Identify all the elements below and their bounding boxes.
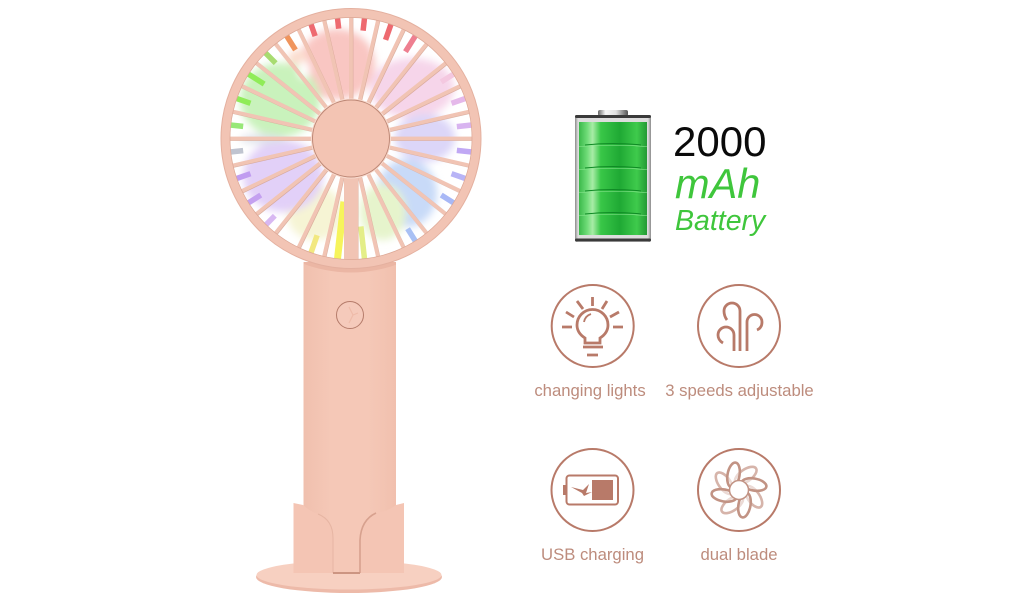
coloured light glow — [230, 18, 472, 259]
light strips — [230, 18, 472, 259]
battery capacity text: 2000 — [673, 118, 766, 165]
feature: 3 speeds adjustable — [665, 285, 814, 400]
battery charge cells — [579, 122, 647, 235]
fan head — [217, 4, 485, 272]
battery icon — [575, 110, 651, 242]
battery capacity text — [673, 118, 767, 237]
handle — [304, 262, 396, 573]
feature: dual blade — [698, 449, 780, 564]
feature: USB charging — [541, 449, 644, 564]
infographic canvas — [220, 8, 813, 593]
label: USB charging — [541, 545, 644, 564]
label: changing lights — [534, 381, 646, 400]
centre hub — [311, 98, 391, 178]
icon: charging battery — [552, 449, 634, 531]
grille spokes — [226, 14, 476, 263]
neck shadow — [304, 262, 396, 272]
battery shell — [575, 115, 651, 242]
label: 3 speeds adjustable — [665, 381, 814, 400]
power button — [336, 302, 364, 328]
outer ring — [221, 8, 481, 268]
stand base — [256, 560, 442, 593]
stand holder — [294, 503, 404, 574]
battery cap — [598, 110, 628, 116]
fan handle and stand — [256, 262, 442, 593]
icon: blade — [698, 449, 780, 531]
icon: light bulb — [552, 285, 634, 367]
battery capacity text: mAh — [675, 160, 760, 207]
feature: changing lights — [534, 285, 646, 400]
icon: air flow — [698, 285, 780, 367]
battery capacity text: Battery — [675, 205, 767, 237]
white grille background — [229, 16, 473, 260]
label: dual blade — [700, 545, 778, 564]
